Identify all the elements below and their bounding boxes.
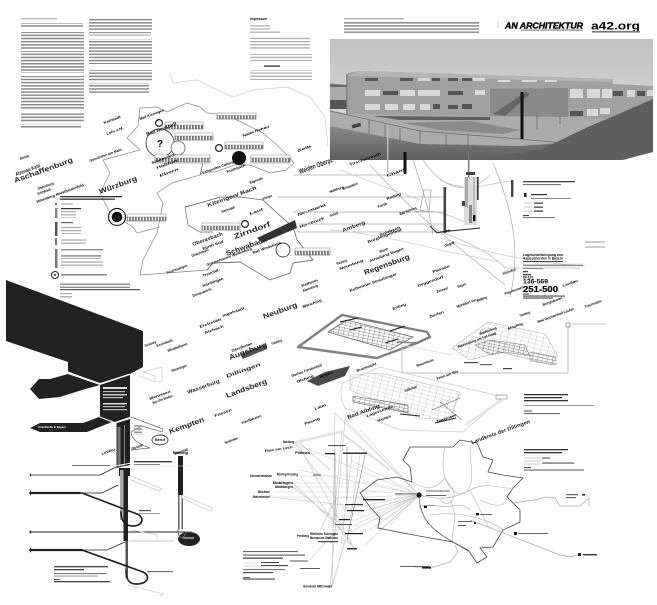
city labels: slanted place names, upper map: Höchstadt — [221, 205, 236, 214]
city labels: slanted place names, upper right: Landau — [562, 279, 578, 288]
city labels: slanted place names, upper map: Ebern — [159, 167, 179, 178]
map: origin labels cluster left: Marktoberdorf — [253, 495, 271, 499]
flow lines: left thin and thick stems with loops — [31, 466, 186, 584]
map: hub and place markers — [395, 490, 548, 535]
city labels: slanted place names, plans area: Prien am See — [436, 369, 459, 381]
city labels: slanted place names, upper map: Kulmbach — [226, 163, 246, 174]
map labels: capacity tables — [127, 113, 330, 255]
city labels: slanted place names, upper map: Alzenau Kahl — [15, 163, 42, 178]
city labels: slanted place names, lower area: Neu-Ulm Senden — [152, 394, 173, 405]
city labels: slanted place names, plans area: Dachau Fürstenfeld — [291, 363, 322, 378]
black funnel: left arm two: Unterkünfte in Bayern — [38, 425, 66, 429]
city labels: slanted place names, upper map: Schwabach — [225, 235, 268, 258]
map: origin labels cluster left: Penzberg — [297, 534, 309, 538]
city labels: slanted place names, lower area: Dillingen — [226, 362, 262, 380]
city labels: slanted place names, upper map: Haßfurt — [156, 158, 179, 170]
map: outer connector lines with remote labels — [400, 494, 597, 569]
city labels: slanted place names, upper map: Karlstadt — [103, 115, 122, 125]
city labels: slanted place names, upper map: Erlangen — [262, 194, 273, 201]
city labels: slanted place names, lower area: Ingolstadt — [222, 306, 246, 318]
chart: right column with dark disc — [173, 451, 213, 546]
map: fan of grey connection lines — [270, 413, 419, 587]
city labels: slanted place names, plans area: Lagerstraße — [366, 405, 394, 418]
city labels: slanted place names, plans area: Mühldorf Inn — [456, 298, 477, 309]
text block: accommodation legend — [523, 181, 575, 218]
city labels: slanted place names, upper map: Schweinfurt — [151, 153, 176, 165]
city labels: slanted place names, upper map: Aschaffenburg — [13, 155, 74, 185]
legend: reception facility categories — [52, 196, 140, 298]
city labels: slanted place names, upper right: Bad Kötzting — [399, 206, 417, 216]
black funnel: lower stacked column — [116, 419, 131, 578]
city labels: slanted place names, upper map: Abensberg — [302, 284, 318, 293]
city labels: slanted place names, lower area: Mindelheim — [167, 342, 188, 353]
city labels: slanted place names, plans area: Laim — [314, 403, 327, 411]
city labels: slanted place names, lower area: Kaufbeuren — [241, 414, 262, 425]
dark hatched label on Augsburg — [240, 344, 267, 359]
separator lines on funnel — [68, 372, 131, 423]
city labels: slanted place names, upper map: Lauf — [249, 207, 265, 216]
schematic: grey curves and horizontal connectors — [277, 160, 605, 297]
city labels: slanted place names, upper right: Schwandorf — [342, 181, 359, 191]
city labels: slanted place names, lower area: Wasserburg — [187, 379, 221, 396]
city labels: slanted place names, upper right: Deggendorf — [417, 275, 445, 288]
city labels: slanted place names, upper map: Treuchtl. — [202, 268, 220, 278]
text block: capacity figures: 84-120 — [523, 276, 533, 280]
city labels: slanted place names, lower area: Aichach — [204, 324, 224, 335]
city labels: slanted place names, upper right: Parsberg — [336, 258, 348, 266]
city labels: slanted place names, upper right: Dingolf. — [444, 240, 456, 248]
city labels: slanted place names, lower area: Immenstadt — [174, 447, 189, 456]
logo: An Architektur: AN ARCHITEKTUR — [504, 20, 584, 30]
city labels: slanted place names, plans area: Wasserburg am Inn Haag — [457, 331, 497, 349]
city labels: slanted place names, plans area: Moosach — [319, 370, 333, 379]
city labels: slanted place names, plans area: Olching — [296, 374, 314, 384]
city labels: slanted place names, lower area: Krumbach — [156, 338, 173, 348]
city labels: slanted place names, upper map: Gemünden am Main — [89, 148, 122, 163]
map: origin labels cluster left: Schrobenhausen — [250, 474, 272, 478]
city labels: slanted place names, lower area: Augsburg — [228, 340, 268, 362]
city labels: slanted place names, plans area: Bad Reichenhall Laufen — [537, 307, 575, 324]
pale chutes branching from columns — [128, 476, 163, 596]
city labels: slanted place names, plans area: Dorfen — [429, 310, 444, 319]
chart annotations — [72, 461, 190, 572]
city labels: slanted place names, lower area: Illertissen — [149, 390, 171, 401]
black funnel: central column with text — [100, 375, 130, 422]
city labels: slanted place names, upper map: Neumarkt — [297, 202, 328, 217]
city labels: slanted place names, upper map: Bad Kissingen — [139, 108, 165, 121]
text block: institutional forms caption — [54, 566, 110, 582]
schematic: vertical bars over the photo — [387, 92, 524, 233]
city labels: slanted place names, lower area: Füssen — [214, 408, 232, 418]
city labels: slanted place names, upper map: Feuchtwangen — [166, 264, 188, 275]
text block: capacity figures: 251-500 — [523, 284, 558, 294]
city labels: slanted place names, upper right: Amberg — [342, 220, 366, 234]
city labels: slanted place names, lower area: Landsberg — [225, 377, 268, 400]
city labels: slanted place names, upper map: Dinkelsbühl — [191, 248, 209, 258]
chart: right column with dark disc: Bildung — [173, 451, 188, 455]
city labels: slanted place names, upper right: Roding — [386, 192, 401, 201]
text block: capacity figures: Asylsuchenden in Bayern — [523, 256, 563, 260]
logo: a42.org: a42.org — [591, 20, 640, 32]
city labels: slanted place names, upper right: Neunburg — [339, 259, 364, 271]
city labels: slanted place names, upper map: Bad Neustadt — [146, 121, 178, 138]
city labels: slanted place names, upper right: Kelheimer Straubinger — [349, 272, 398, 293]
city labels: slanted place names, upper right: Sulzbach — [379, 226, 401, 237]
dark hatched label cluster — [307, 366, 350, 386]
text block: network caption left of map — [243, 551, 320, 580]
flow arrow heads — [29, 473, 31, 553]
city labels: slanted place names, upper right: Vilshofen — [502, 267, 516, 276]
photo: reception centre building — [330, 39, 653, 160]
city labels: slanted place names, lower area: Lindau — [101, 447, 115, 456]
city labels: slanted place names, plans area: Bad Aibling — [347, 404, 381, 421]
map: Germany outline with federal states — [100, 103, 313, 280]
map: origin labels cluster left: Pöttmes — [295, 451, 310, 455]
city labels: slanted place names, upper right: Wörth — [379, 247, 389, 254]
text block: capacity figures: 136-569 — [523, 280, 549, 286]
city labels: slanted place names, plans area: Tegernsee — [436, 413, 457, 424]
map: origin labels cluster left: Rain am Lech — [265, 445, 293, 453]
city labels: slanted place names, plans area: Miesbach — [377, 414, 391, 423]
text block: introduction column 1 — [21, 18, 84, 129]
map: rail axis from hub — [419, 495, 470, 552]
map markers: reception centres and circles — [108, 120, 290, 257]
city labels: slanted place names, upper map: Lichtenfels Coburg — [202, 160, 234, 175]
map: origin labels cluster left: Weilheim Schongau — [310, 532, 338, 536]
city labels: slanted place names, upper map: Bad Windsheim — [252, 241, 282, 255]
city labels: slanted place names, upper right: Cham — [386, 168, 405, 178]
city labels: slanted place names, plans area: Pasing — [304, 417, 320, 426]
city labels: slanted place names, lower area: Gersthofen — [231, 342, 253, 353]
black funnel: left arm one — [30, 374, 100, 399]
city labels: slanted place names, plans area: Altötting — [476, 295, 488, 303]
city labels: slanted place names, lower area — [101, 298, 322, 456]
city labels: slanted place names, lower area: Kempten — [168, 415, 205, 436]
city labels: slanted place names, upper right: Regensburg — [363, 252, 411, 277]
city labels: slanted place names, plans area: Rosenheim — [416, 358, 434, 368]
black funnel: left arm two — [30, 417, 112, 432]
city labels: slanted place names, upper map: Würzburg — [98, 174, 138, 196]
city labels: slanted place names, lower area: Friedberg — [271, 338, 283, 346]
city labels: slanted place names, upper map: Alzenau — [19, 154, 30, 161]
city labels: slanted place names, lower area: Oberstdorf — [131, 443, 144, 451]
city labels: slanted place names, lower area: Sonthofen — [224, 436, 238, 445]
city labels: slanted place names, upper map: Selb — [297, 144, 313, 153]
city labels: slanted place names, upper map: Oberasbach — [192, 231, 224, 248]
city labels: slanted place names, lower area: Eichstätt — [199, 317, 223, 329]
city labels: slanted place names, lower area: Manching — [302, 298, 322, 309]
city labels: slanted place names, upper map: Fürth Süd — [202, 240, 224, 251]
city labels: slanted place names, plans area: Waldkraiburg — [479, 326, 497, 336]
city labels: slanted place names, upper map: Miltenberg Marktheidenfeld — [36, 183, 84, 204]
city labels: slanted place names, upper map: Gunzenhausen Weißenburg — [206, 247, 252, 267]
city labels: slanted place names, upper right: Burglengenfeld — [367, 228, 402, 244]
building plan: floor plan frame — [298, 315, 430, 358]
city labels: slanted place names, plans area: Ampfing — [507, 322, 523, 331]
black funnel: upper block — [6, 280, 143, 383]
city labels: slanted place names, upper map: Weiden Oberpf. — [298, 155, 335, 176]
text block: capacity figures — [523, 253, 583, 299]
map: origin labels cluster left — [250, 440, 385, 588]
map: district outline — [360, 440, 523, 563]
city labels: slanted place names, upper right: Passau — [432, 264, 450, 274]
map: origin labels cluster left: Neuburg — [283, 440, 294, 444]
dark hatched map cluster — [257, 220, 297, 243]
text block: imprint: Impressum — [250, 17, 267, 21]
chart: pale outlined chute with small bars: Beruf — [155, 438, 166, 442]
city labels: slanted place names, upper right: Viechtach — [329, 211, 339, 218]
city labels: slanted place names, plans area: Burghausen — [542, 296, 563, 307]
city labels: slanted place names, upper map: Obernburg — [37, 181, 54, 191]
text block: introduction column 2 — [89, 18, 152, 93]
city labels: slanted place names, upper map: Bayreuth — [249, 176, 263, 185]
city labels: slanted place names, plans area: Trostberg — [519, 310, 531, 318]
city labels: slanted place names, plans area: Landkreis der Dillingen — [471, 419, 531, 446]
city labels: slanted place names, upper map: Lohr a.M. — [106, 126, 124, 136]
map: origin labels cluster left: Bobingen — [273, 481, 293, 485]
map: origin labels cluster left: Buchloe — [258, 490, 270, 494]
city labels: slanted place names, upper right: Tirschenreuth — [349, 152, 381, 167]
building plan: lower axonometric dormitory — [341, 367, 507, 432]
city labels: slanted place names, upper right: Nabburg — [329, 185, 344, 194]
city labels: slanted place names, upper map: Kitzingen/ Bach — [207, 185, 258, 209]
map: origin labels cluster left: Garmisch Mittenwald — [303, 584, 332, 588]
map: origin labels cluster left: Stadtbergen — [275, 485, 293, 489]
city labels: slanted place names, upper right: Zwiesel — [436, 286, 449, 294]
text block: sleeping quarters caption — [524, 394, 594, 414]
city labels: slanted place names, upper map — [13, 108, 335, 298]
map: origin labels cluster left: Mering Kissing — [277, 472, 298, 476]
chart: pale outlined chute with small bars — [131, 367, 168, 450]
city labels: slanted place names, plans area: Kolbermoor — [404, 385, 418, 393]
text block: top centre note — [344, 18, 479, 34]
city labels: slanted place names, upper right: Furth — [377, 202, 388, 209]
text block: capacity figures: Lagerunterbringung von — [523, 253, 563, 257]
map: north Germany pale outline — [170, 73, 328, 147]
city labels: slanted place names, plans area: Traunstein — [584, 299, 602, 309]
city labels: slanted place names, plans area — [291, 295, 602, 446]
city labels: slanted place names, lower area: Memmingen — [171, 364, 187, 373]
city labels: slanted place names, upper map: Naila Rehau — [242, 125, 270, 138]
city labels: slanted place names, upper right: Regen — [457, 282, 467, 289]
city labels: slanted place names, lower area: Neuburg — [262, 300, 299, 321]
city labels: slanted place names, upper map: Kelheim — [301, 278, 318, 288]
city labels: slanted place names, upper map: Nördlingen — [202, 277, 224, 288]
city labels: slanted place names, upper map: Donauwörth — [192, 287, 212, 298]
city labels: slanted place names, upper map: Hersbruck — [299, 216, 325, 229]
map: internal district boundaries — [412, 445, 513, 542]
map: origin labels cluster left: Murnau am Staffelsee — [310, 536, 338, 540]
city labels: slanted place names, upper right — [329, 152, 578, 296]
text block: regional network legend — [524, 449, 584, 471]
city labels: slanted place names, plans area: Erding — [392, 302, 406, 311]
city labels: slanted place names, upper map: Erlenbach — [37, 187, 51, 196]
map markers: reception centres and circles: ? — [157, 139, 163, 150]
city labels: slanted place names, lower area: Günzburg — [144, 340, 157, 348]
building plan: right axonometric interior — [402, 322, 606, 373]
city labels: slanted place names, upper right: Straubing Bogen — [369, 247, 404, 263]
city labels: slanted place names, upper right: Pfarrkirchen — [504, 285, 524, 296]
city labels: slanted place names, plans area: Bruckmühl — [356, 362, 377, 373]
city labels: slanted place names, upper map: Zirndorf — [233, 219, 272, 241]
text block: imprint — [250, 17, 312, 80]
